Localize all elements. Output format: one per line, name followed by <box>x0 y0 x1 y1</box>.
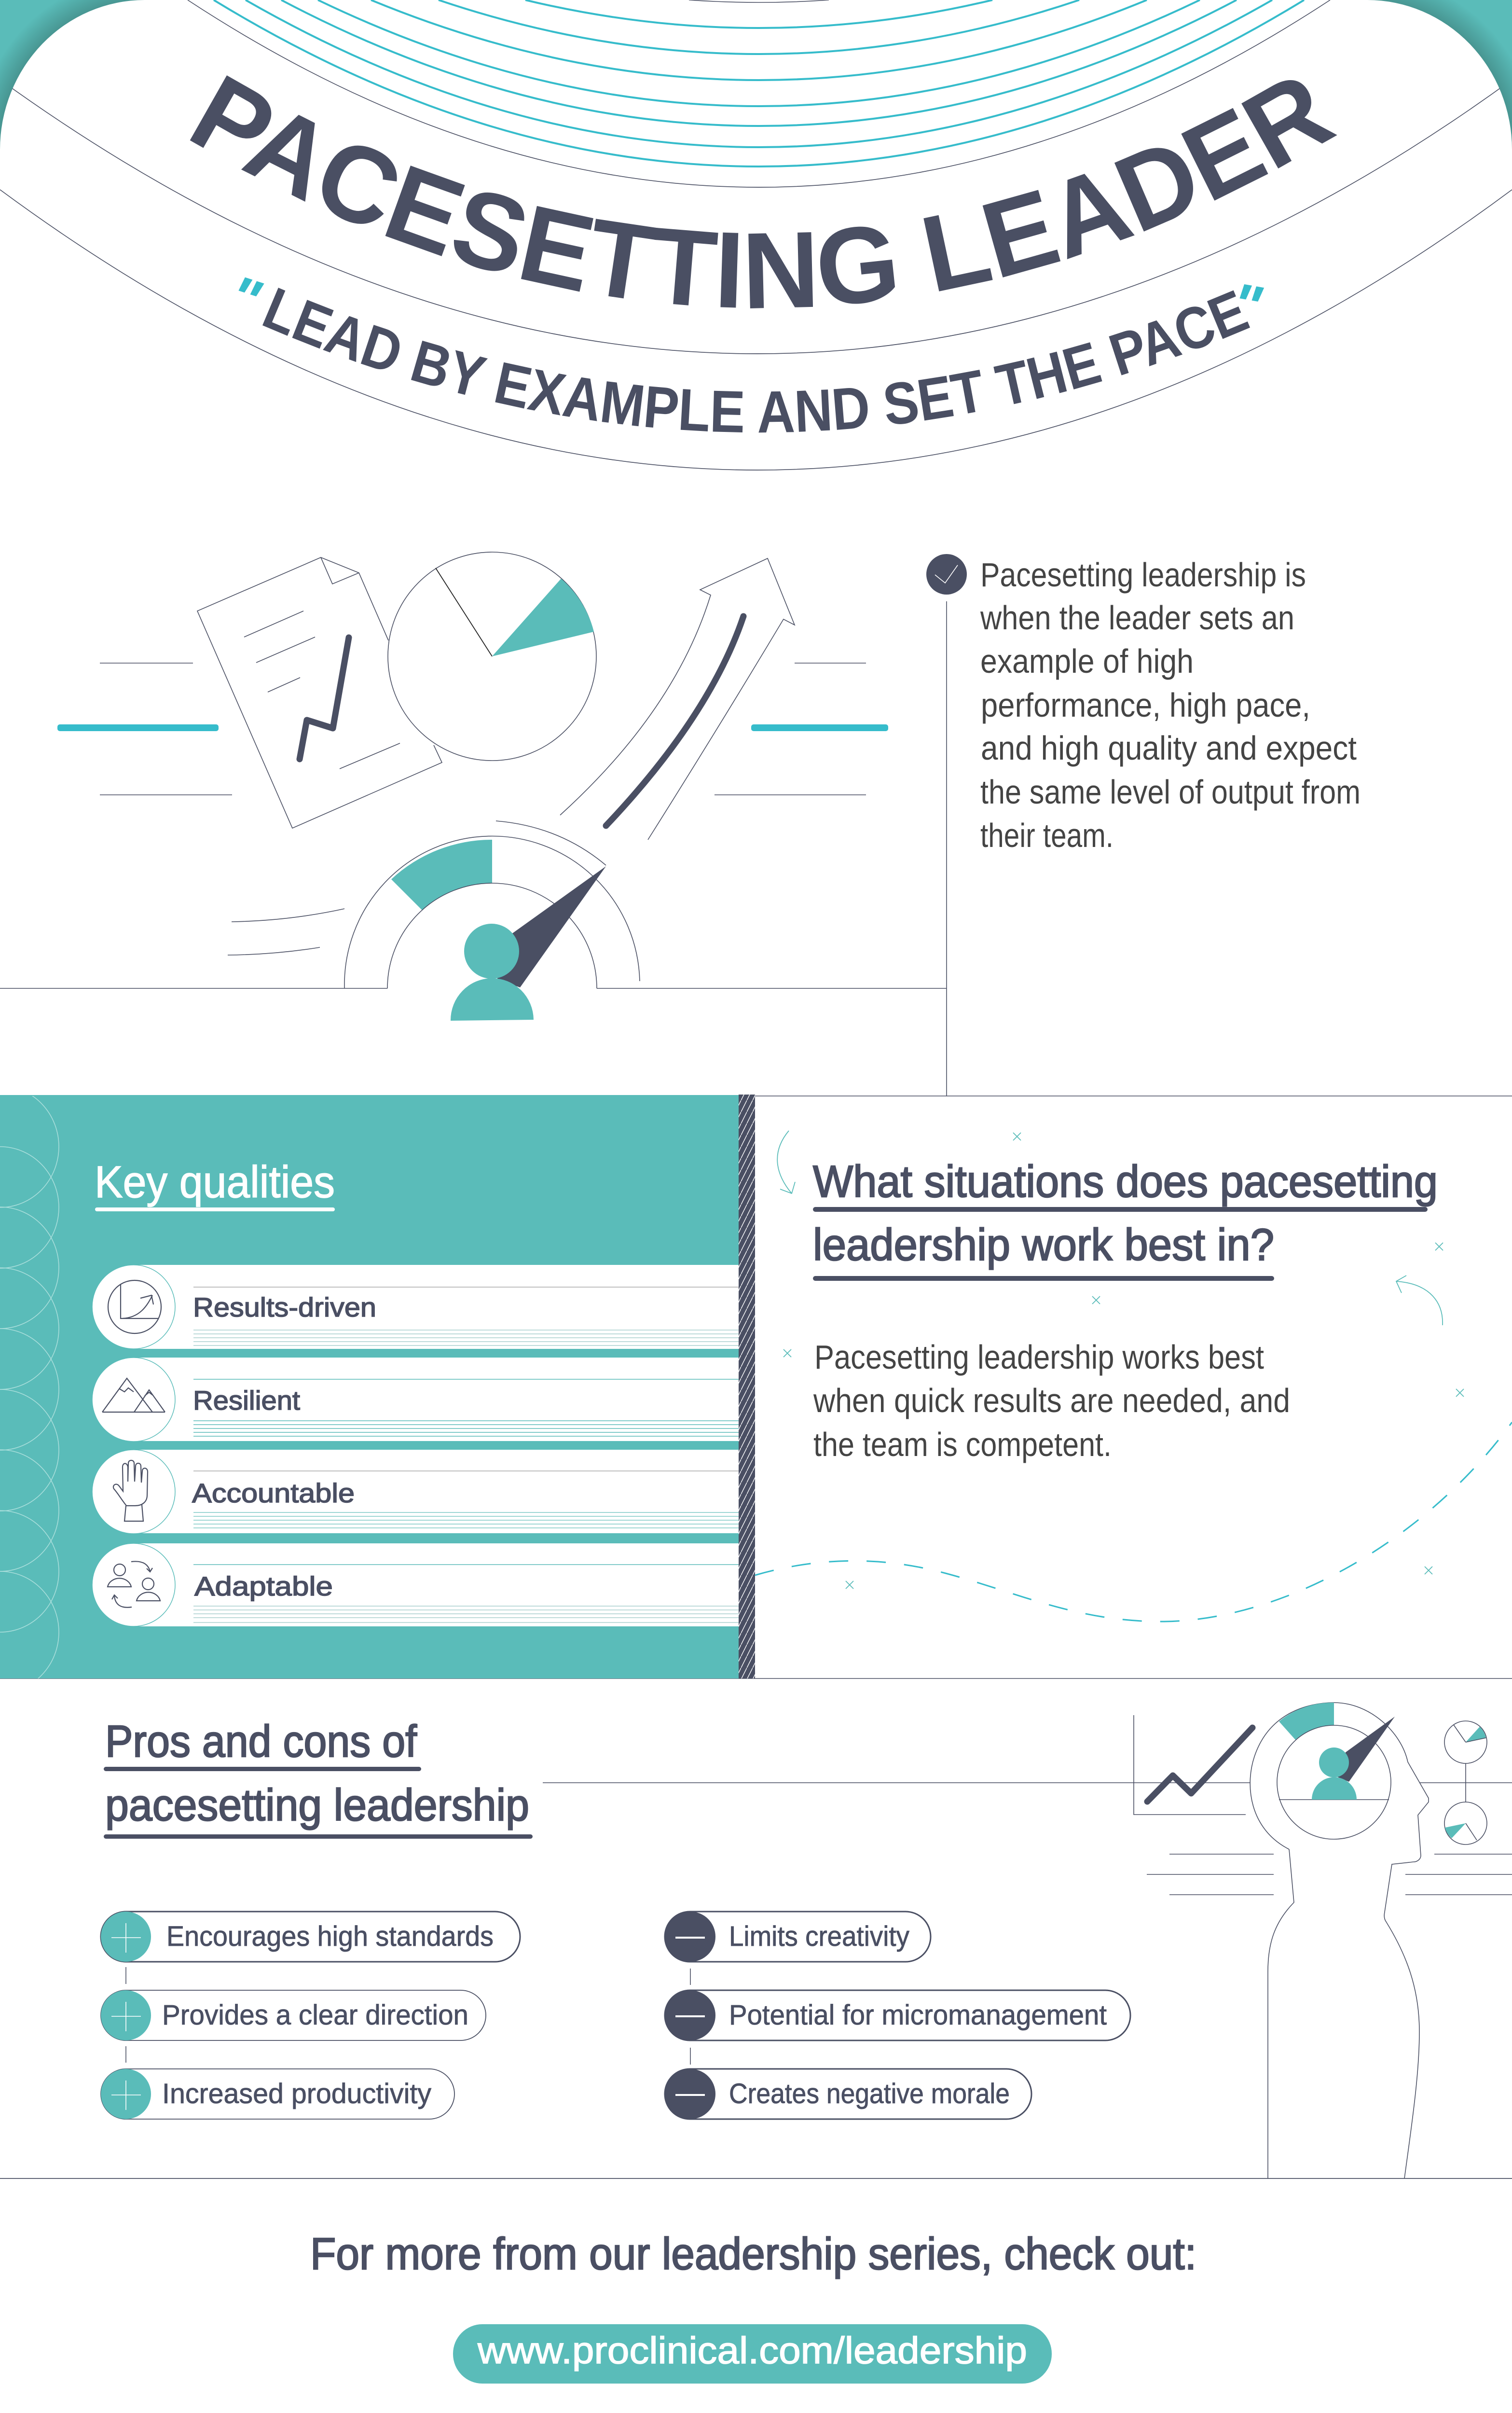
pill: increased productivity: Increased productivity <box>162 2078 431 2109</box>
intro text block: when the leader sets an <box>980 599 1294 637</box>
hatched divider <box>739 1095 755 1678</box>
pill: creates negative morale: Creates negative morale <box>729 2078 1010 2109</box>
subtitle: " <box>1227 270 1267 340</box>
intro text block: the same level of output from <box>980 773 1361 811</box>
decoration: crosses <box>783 1133 1464 1589</box>
intro text block <box>926 554 1361 854</box>
rule above footer <box>0 2178 1512 2179</box>
line chart <box>1134 1715 1252 1815</box>
report document <box>197 557 442 828</box>
icon: mountains <box>102 1378 165 1412</box>
body text: Pacesetting leadership works best <box>814 1338 1264 1376</box>
cons list <box>665 1912 1130 2119</box>
small pie charts <box>1444 1721 1487 1844</box>
section rules <box>0 1096 1512 1678</box>
title: PACESETTING LEADER <box>190 75 1337 308</box>
pill: provides a clear direction <box>101 1990 486 2040</box>
head silhouette <box>1250 1703 1429 2178</box>
rule to illustration <box>543 1782 1512 1783</box>
row: resilient: Resilient <box>193 1385 300 1415</box>
header arcs <box>0 0 1512 470</box>
pros list <box>101 1912 520 2119</box>
arrow: left curved <box>777 1131 795 1193</box>
icon: raised hand <box>113 1460 148 1521</box>
body text: when quick results are needed, and <box>813 1382 1290 1419</box>
intro text block: Pacesetting leadership is <box>980 556 1306 594</box>
pill: encourages high standards <box>101 1912 520 1962</box>
link pill: www.proclinical.com/leadership <box>477 2329 1027 2371</box>
lines beside neck <box>1147 1854 1512 1895</box>
speedometer <box>0 821 947 1021</box>
person icon <box>451 924 534 1021</box>
top-right teal corner <box>1367 0 1512 150</box>
row: resilient <box>92 1358 739 1442</box>
body text <box>813 1338 1290 1463</box>
arrow: right curved <box>1396 1276 1443 1325</box>
pill: encourages high standards: Encourages high standards <box>166 1921 494 1952</box>
panel: what situations <box>755 1131 1512 1622</box>
top-left teal corner <box>0 0 145 150</box>
panel: key qualities <box>0 1086 755 1693</box>
footer heading: For more from our leadership series, check out: <box>310 2229 1196 2279</box>
heading: situations <box>813 1156 1438 1281</box>
intro text block: their team. <box>980 817 1113 854</box>
row: accountable: Accountable <box>192 1478 355 1508</box>
subtitle: " <box>221 263 269 334</box>
intro text block: and high quality and expect <box>981 729 1357 767</box>
row: accountable <box>92 1450 739 1534</box>
heading: pros and cons <box>104 1716 533 1839</box>
row: results-driven: Results-driven <box>193 1292 376 1322</box>
heading: pros and cons: Pros and cons of <box>105 1716 417 1766</box>
illustration: speed gauge, report and growth arrow <box>0 552 947 1021</box>
pill: provides a clear direction: Provides a clear direction <box>162 1999 468 2031</box>
decoration: dashed wave <box>755 1422 1512 1622</box>
body text: the team is competent. <box>813 1426 1112 1463</box>
intro text block: performance, high pace, <box>981 686 1310 724</box>
growth arrow <box>560 558 795 840</box>
pill: limits creativity <box>665 1912 931 1962</box>
heading: situations: What situations does pacesetting <box>813 1156 1438 1206</box>
pill: creates negative morale <box>665 2069 1031 2119</box>
connector line <box>946 601 947 1096</box>
mini gauge <box>1277 1703 1395 1839</box>
pill: limits creativity: Limits creativity <box>729 1921 909 1952</box>
illustration: head with gauge <box>1134 1703 1512 2178</box>
heading: situations: leadership work best in? <box>813 1220 1274 1270</box>
pill: increased productivity <box>101 2069 454 2119</box>
icon: check <box>926 554 967 595</box>
pill: potential for micromanagement: Potential for micromanagement <box>729 1999 1107 2031</box>
subtitle: LEAD BY EXAMPLE AND SET THE PACE <box>262 288 1250 432</box>
pie chart <box>388 552 596 761</box>
heading: key qualities: Key qualities <box>95 1157 335 1207</box>
decorative circles <box>0 1086 59 1693</box>
pill: potential for micromanagement <box>665 1990 1130 2040</box>
icon: growth chart <box>108 1280 161 1333</box>
link pill <box>453 2324 1052 2384</box>
intro text block: example of high <box>980 642 1194 680</box>
heading: pros and cons: pacesetting leadership <box>105 1780 529 1830</box>
icon: swapping people <box>108 1561 160 1608</box>
row: adaptable: Adaptable <box>194 1571 333 1601</box>
row: results-driven <box>92 1265 739 1349</box>
row: adaptable <box>92 1543 739 1626</box>
side lines <box>57 663 888 795</box>
